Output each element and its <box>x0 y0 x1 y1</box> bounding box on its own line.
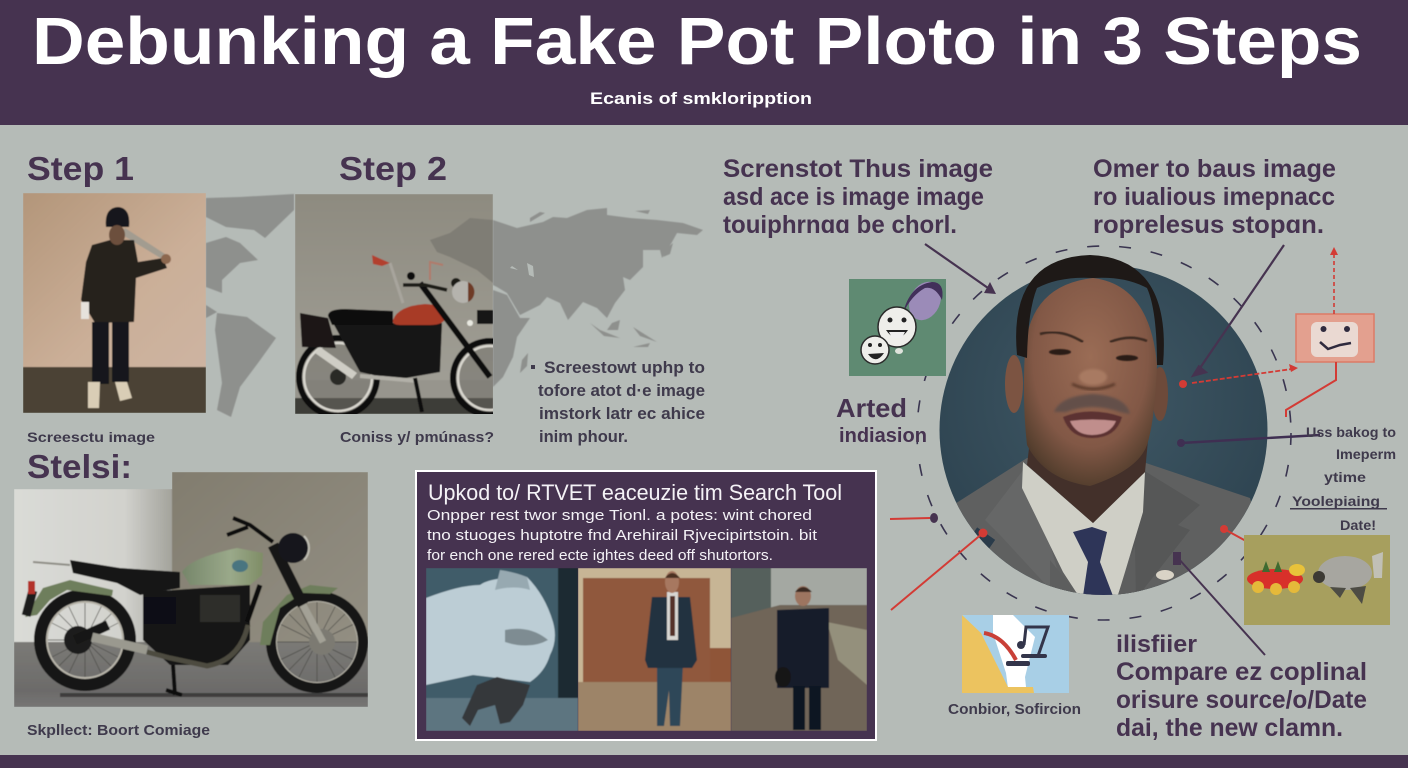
eyes <box>1049 349 1138 361</box>
map holes <box>510 263 534 277</box>
caption: step 2: Coniss y/ pmúnass? <box>340 429 494 446</box>
photo: red motorcycle <box>295 194 493 414</box>
exhaust <box>92 637 147 650</box>
photo: green motorcycle <box>14 472 368 707</box>
caption: step 3: Skpllect: Boort Comiage <box>27 722 210 739</box>
bottom band <box>0 755 1408 768</box>
ears <box>1005 355 1023 413</box>
heading: step 3: Stelsi: <box>27 448 132 485</box>
text: compare block <box>1116 631 1367 742</box>
headlight <box>278 533 308 563</box>
text: side note: Yoolepiaing <box>1292 493 1380 509</box>
text: upper right instruction: Omer to baus image <box>1093 155 1336 183</box>
shirt and collar <box>1022 462 1145 595</box>
panel body text: for ench one rered ecte ightes deed off shutortors. <box>427 548 773 564</box>
panel body text: tno stuoges huptotre fnd Arehirail Rjvecipirtstoin. bit <box>427 528 817 544</box>
heading: step 2: Step 2 <box>339 150 447 187</box>
text: side note: Date! <box>1340 517 1376 533</box>
text: upper middle instruction: Screnstot Thus image <box>723 155 993 183</box>
connector: purple to compare text <box>1173 552 1265 655</box>
icon: food and fish <box>1244 535 1390 625</box>
engine <box>143 585 250 665</box>
arrow: red dashed up <box>1330 247 1338 314</box>
photo: man at door <box>578 568 731 731</box>
panel body text: Onpper rest twor smge Tionl. a potes: wint chored <box>427 508 812 524</box>
front fender <box>260 585 338 645</box>
text block: map note <box>531 358 705 446</box>
hair <box>1016 255 1164 365</box>
seat <box>70 560 180 595</box>
text: upper middle instruction: touiphrnɑɑ be chorl. <box>723 211 957 239</box>
text block: map note: Screestowt uphp to <box>544 358 705 377</box>
photo: man on muddy road <box>731 568 867 731</box>
header band <box>0 0 1408 125</box>
neck <box>1027 440 1148 523</box>
nose <box>1072 369 1115 389</box>
text: upper right instruction <box>1093 155 1336 239</box>
text: upper right instruction: ro iualious imepnacc <box>1093 183 1335 211</box>
text: compare block: ilisfiier <box>1116 631 1197 658</box>
text: upper right instruction: roprelesus stopɑn. <box>1093 211 1324 239</box>
subtitle: Ecanis of smkloripption <box>590 89 812 108</box>
lapel pin <box>1156 570 1174 580</box>
arrow: purple to right of portrait <box>1194 245 1284 375</box>
text: side note: ytime <box>1324 469 1366 485</box>
icon: smiley faces <box>849 277 947 376</box>
icon: blue and yellow tool <box>962 615 1069 693</box>
text: upper middle instruction <box>723 155 993 239</box>
rear wheel <box>40 595 130 685</box>
title: Debunking a Fake Pot Ploto in 3 Steps <box>32 4 1362 79</box>
text: compare block: dai, the new clamn. <box>1116 714 1343 742</box>
text: side note: Imeperm <box>1336 446 1396 462</box>
fork <box>273 545 303 605</box>
text block: map note: imstork latr ec ahice <box>539 404 705 423</box>
mouth <box>1063 412 1122 438</box>
connector: left red with pin <box>890 513 938 523</box>
front wheel <box>271 596 363 688</box>
portrait <box>930 255 1280 600</box>
connector: purple to side note <box>1177 435 1320 447</box>
text: compare block: Compare ez coplinal <box>1116 658 1367 686</box>
connector: red elbow <box>1286 362 1336 417</box>
panel body text <box>427 508 817 564</box>
panel: search tool <box>416 471 876 740</box>
text: arted indiasion: Arted <box>836 393 907 423</box>
head <box>1024 278 1157 486</box>
caption: step 1: Screesctu image <box>27 429 155 445</box>
caption: blue tool: Conbior, Sofircion <box>948 702 1081 718</box>
text: side note: Uss bakog to <box>1306 424 1396 440</box>
eyebrows <box>1040 332 1147 342</box>
arrow: purple to top of portrait <box>925 244 996 294</box>
photo: person with baton <box>23 193 206 413</box>
connector: lower right red <box>1220 525 1246 541</box>
photo: stone sculpture <box>426 568 578 731</box>
connector: lower left red <box>891 528 988 610</box>
mustache stubble <box>1054 394 1130 414</box>
arrow: red dashed to robot box <box>1179 364 1298 388</box>
world map <box>206 194 703 417</box>
tie <box>1073 527 1113 596</box>
suit <box>956 458 1251 595</box>
text: upper middle instruction: asd ace is image image <box>723 183 984 211</box>
text block: map note: inim phour. <box>539 427 628 446</box>
panel heading: Upkod to/ RTVET eaceuzie tim Search Tool <box>428 480 842 505</box>
text: arted indiasion: indiasion <box>839 425 927 447</box>
icon: robot face box <box>1296 314 1374 362</box>
heading: step 1: Step 1 <box>27 150 134 187</box>
text: side note <box>1290 424 1396 533</box>
dashed ring <box>917 246 1291 620</box>
rear fender <box>25 580 113 617</box>
text block: map note: tofore atot d·e image <box>538 381 705 400</box>
text: compare block: orisure source/o/Date <box>1116 686 1367 714</box>
tank <box>182 548 263 585</box>
text: arted indiasion <box>836 393 927 447</box>
